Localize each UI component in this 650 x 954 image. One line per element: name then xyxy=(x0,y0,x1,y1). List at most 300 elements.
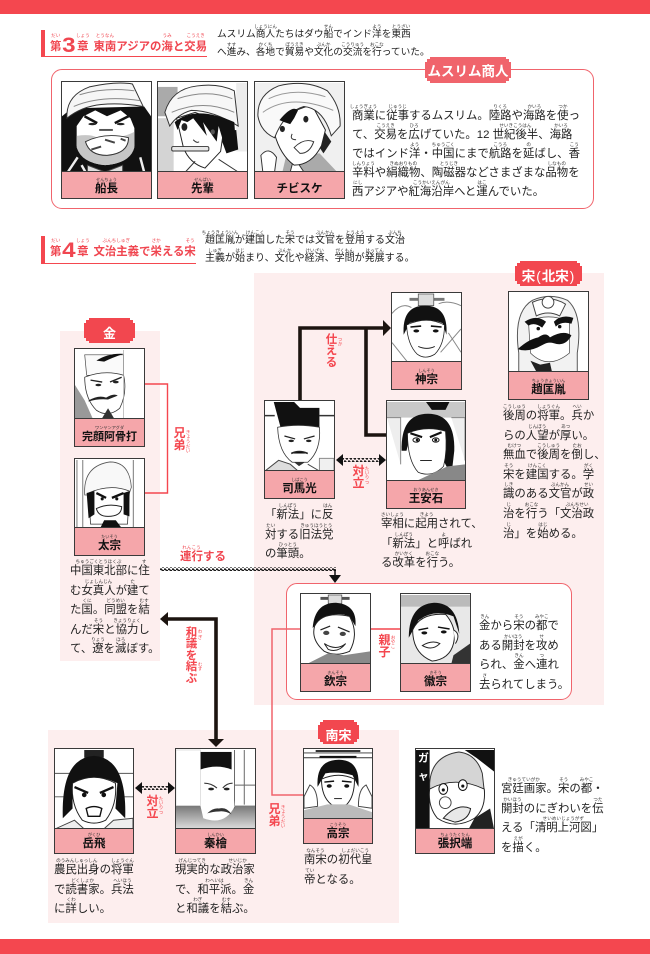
label: brothers xyxy=(173,426,191,453)
muslim merchants text: 品物 xyxy=(545,167,568,179)
text: しょうにん xyxy=(484,52,506,57)
text: Zhao Kuangyin: しき xyxy=(504,482,513,487)
text: Zhao Kuangyin: はじ xyxy=(538,522,548,527)
text: Jin: 国 xyxy=(81,604,93,616)
muslim merchants text: 延 xyxy=(523,148,534,160)
portrait: Qinzong: 欽宗 xyxy=(324,676,347,688)
text: Zhang Zeduan: 宋 xyxy=(558,783,569,795)
text: Zhao Kuangyin: がく xyxy=(584,463,593,468)
portrait: Zhang Zeduan xyxy=(415,748,495,854)
text: Jin: た xyxy=(130,579,135,584)
label: peace treaty: 結 xyxy=(186,661,197,673)
text: Zhang Zeduan: つた xyxy=(593,797,602,802)
chapter 4 intro text: 文治 xyxy=(385,235,405,246)
text: Zhao Kuangyin xyxy=(503,404,606,540)
text: Qinzong and Huizong: ある を め xyxy=(479,640,559,652)
text: Wang Anshi: に されて、 xyxy=(404,518,483,530)
chapter 4 intro text: 発展 xyxy=(365,253,385,264)
chapter 4 intro text: そう xyxy=(285,230,295,234)
text: Zhao Kuangyin: を する。 xyxy=(514,469,583,481)
label: peace treaty: ぶ xyxy=(186,673,197,685)
top band xyxy=(0,0,650,14)
label: serve xyxy=(326,333,343,369)
text: Jin: 宋 xyxy=(93,624,104,636)
arrow: serve xyxy=(300,320,391,435)
text: Zhang Zeduan: を く。 xyxy=(501,842,547,854)
portrait: Shenzong: しんそう xyxy=(418,368,435,373)
text: Sima Guang: たい xyxy=(266,523,275,528)
text: Jin: 同盟 xyxy=(104,604,127,616)
text: Zhao Kuangyin: せい xyxy=(584,482,593,487)
muslim merchants text: 使 xyxy=(557,110,569,122)
text: Wang Anshi: 「 」と ばれ xyxy=(381,538,472,550)
muslim merchants text: こうかいえんがん xyxy=(413,180,450,185)
muslim merchants text: 陶磁器 xyxy=(432,167,466,179)
text: Sima Guang: 反 xyxy=(322,509,333,521)
text: れんこう xyxy=(182,545,201,550)
text: Zhang Zeduan: える「 」 xyxy=(501,822,603,834)
chapter 4 heading: 第 xyxy=(50,246,61,258)
text: たいりつ xyxy=(365,466,370,484)
chapter 4 intro text: 建国 xyxy=(245,235,265,246)
chapter 3 intro text: ムスリム たちはダウ でインド を xyxy=(217,29,391,40)
text: Jin: 遼 xyxy=(92,643,104,655)
text: きょうだい xyxy=(281,805,286,828)
muslim merchants text: 交易 xyxy=(374,129,397,141)
text: Jin: くに xyxy=(83,598,92,603)
text: Zhang Zeduan: 都 xyxy=(581,783,592,795)
label: peace treaty xyxy=(186,626,203,685)
chapter 3 intro text: 交流 xyxy=(343,47,362,58)
chapter 4 heading: そう xyxy=(185,238,195,243)
text: Qin Hui: 和平派 xyxy=(197,884,232,896)
label: escort: する xyxy=(203,551,226,563)
text: Zhao Kuangyin: 文治政 xyxy=(560,508,594,520)
arrow: rivalry Sima Guang and Wang Anshi xyxy=(336,454,386,466)
tag: Northern Song xyxy=(515,261,582,286)
text: Zhao Kuangyin: あつ xyxy=(561,424,570,429)
text: Qin Hui: 結 xyxy=(221,903,232,915)
text: Zhao Kuangyin: けんこく xyxy=(528,463,546,468)
tag: muslim merchants: ムスリム xyxy=(428,64,482,79)
text: Zhao Kuangyin: 建国 xyxy=(526,469,549,481)
text: Sima Guang: きゅうほうとう xyxy=(300,523,332,528)
muslim merchants text: しなもの xyxy=(548,161,566,166)
chapter 3 intro text: せん xyxy=(324,24,333,28)
tag: Southern Song: 南宋 xyxy=(325,728,352,743)
muslim merchants text: 海路 xyxy=(523,110,546,122)
text: りくろ xyxy=(493,104,507,109)
muslim merchants text: て、 を げていた。12 、 xyxy=(352,129,550,141)
text: Sima Guang: 新法 xyxy=(276,509,299,521)
text: Zhang Zeduan: 清明上河図 xyxy=(535,822,592,834)
chapter 4 intro text: 趙匡胤 xyxy=(205,235,235,246)
text: Zhao Kuangyin: たお xyxy=(573,443,582,448)
bracket: brothers Wanyan Aguda and Taizong xyxy=(145,384,168,493)
text: Wang Anshi: 改革 xyxy=(392,557,415,569)
label: serve: る xyxy=(326,357,337,369)
chapter 4 heading: だい xyxy=(51,238,60,243)
text: Jin: 結 xyxy=(138,604,150,616)
text: Qinzong and Huizong: さ xyxy=(482,673,487,678)
chapter 3 heading: アジアの と xyxy=(116,41,184,53)
muslim merchants text: かいろ xyxy=(554,123,568,128)
text: Zhao Kuangyin: じんぼう xyxy=(528,424,546,429)
text: Zhao Kuangyin: こうしゅう xyxy=(537,443,560,448)
text: Zhang Zeduan: のにぎわいを xyxy=(524,803,592,815)
muslim merchants text: 陸路 xyxy=(489,110,512,122)
text: Qinzong and Huizong xyxy=(479,614,569,691)
text: Gaozong: てい xyxy=(305,868,314,873)
text: Zhao Kuangyin: 将軍 xyxy=(537,410,560,422)
portrait: Wang Anshi xyxy=(386,400,466,509)
muslim merchants text: ひろ xyxy=(410,123,419,128)
text: Jin: に xyxy=(127,565,138,577)
portrait: captain: 船長 xyxy=(95,182,118,194)
text: そう xyxy=(524,256,533,261)
label: brothers (Southern Song): 兄 xyxy=(268,802,280,816)
text: Qinzong and Huizong: 宋 xyxy=(513,620,525,632)
text: Gaozong: 初代皇 xyxy=(338,854,372,866)
chapter 3 intro text: 商人 xyxy=(256,29,275,40)
chapter 3 intro text: 洋 xyxy=(372,29,382,40)
portrait: captain: せんちょう xyxy=(96,177,117,182)
text: Zhao Kuangyin: のある が xyxy=(514,488,583,500)
tag: muslim merchants xyxy=(425,57,511,83)
text: Yue Fei: くわ xyxy=(67,897,76,902)
text: かいろ xyxy=(527,104,541,109)
chapter 4 heading: 栄 xyxy=(150,246,162,258)
text: Qinzong and Huizong: せ xyxy=(539,634,544,639)
text: Jin: ほろ xyxy=(116,637,125,642)
chapter 4 heading: さか xyxy=(152,238,161,243)
text: はん xyxy=(323,503,332,508)
muslim merchants text: 海路 xyxy=(550,129,572,141)
text: Wang Anshi: しんぽう xyxy=(395,532,413,537)
text: Jin xyxy=(70,558,159,655)
label: rivalry: 対 xyxy=(352,464,364,478)
portrait: Yue Fei: 岳飛 xyxy=(82,838,106,850)
muslim merchants text: 航路 xyxy=(489,148,512,160)
portrait: Zhang Zeduan: ャ xyxy=(418,770,429,782)
portrait: chibisuke xyxy=(254,81,345,199)
muslim merchants text: 西 xyxy=(352,186,363,198)
portrait: senior: せんぱい xyxy=(194,177,211,182)
portrait: Zhang Zeduan: ちょうたくたん xyxy=(440,832,470,837)
muslim merchants text xyxy=(350,104,580,198)
chapter 3 intro text: こうりゅう xyxy=(341,42,364,46)
label: brothers (Southern Song) xyxy=(268,802,286,828)
portrait: Taizong (Jin) xyxy=(74,458,145,556)
text: Jin: きょうりょく xyxy=(113,618,141,623)
portrait: Sima Guang xyxy=(264,400,335,499)
portrait: Qin Hui: 秦檜 xyxy=(204,838,227,850)
panel: Jin background xyxy=(60,331,160,661)
muslim merchants text: 絹織物 xyxy=(386,167,420,179)
text: Qin Hui: 金 xyxy=(243,884,254,896)
text: Yue Fei: に しい。 xyxy=(54,903,111,915)
line: parent and child xyxy=(371,628,400,630)
text: Zhao Kuangyin: 学 xyxy=(583,469,594,481)
portrait: Sima Guang: しばこう xyxy=(291,477,308,482)
chapter 4 heading xyxy=(41,236,196,264)
text: Sima Guang: 「 」に xyxy=(265,509,322,521)
text: Zhang Zeduan: 宮廷画家 xyxy=(501,783,547,795)
muslim merchants text: に するムスリム。 や を っ xyxy=(375,110,580,122)
portrait: Qinzong: きんそう xyxy=(327,670,344,675)
chapter 4 heading: で える xyxy=(139,246,184,258)
text: Yue Fei: で 。 xyxy=(54,884,111,896)
muslim merchants text: や 、 などさまざまな を xyxy=(375,167,580,179)
text: Qinzong and Huizong: 金 xyxy=(513,659,525,671)
portrait: Zhao Kuangyin: 趙匡胤 xyxy=(531,384,566,396)
chapter 3 intro text: よう xyxy=(372,24,381,28)
chapter 3 heading: 章 xyxy=(77,41,88,53)
text: Gaozong xyxy=(304,848,372,886)
text: なんそう xyxy=(329,715,348,720)
chapter 4 heading: 文治主義 xyxy=(94,246,139,258)
text: Zhao Kuangyin: 政 xyxy=(583,488,594,500)
portrait: Wang Anshi: 王安石 xyxy=(409,492,443,504)
portrait: Taizong (Jin): 太宗 xyxy=(98,540,121,552)
text: す xyxy=(142,559,146,564)
muslim merchants text: しんりょう xyxy=(352,161,375,166)
label: rivalry (Southern Song): 対 xyxy=(146,794,158,808)
text: Yue Fei: へいほう xyxy=(113,878,132,883)
portrait: Zhao Kuangyin xyxy=(508,291,589,400)
text: そう xyxy=(514,614,524,619)
panel: Northern Song background xyxy=(254,273,604,705)
chapter 3 intro text: 貿易 xyxy=(285,47,304,58)
portrait: chibisuke: チビスケ xyxy=(276,182,322,194)
muslim merchants text: にし xyxy=(353,180,362,185)
label: brothers (Southern Song): 弟 xyxy=(268,814,280,828)
chapter 3 heading xyxy=(41,30,207,57)
text: むす xyxy=(198,662,203,671)
text: Jin: 滅 xyxy=(115,643,126,655)
text: Zhao Kuangyin: 人望 xyxy=(526,430,549,442)
portrait: Qin Hui: しんかい xyxy=(207,832,224,837)
text: Zhao Kuangyin: の 。 か xyxy=(526,410,594,422)
chapter 4 intro text: ぶんか xyxy=(278,248,292,252)
chapter 4 heading: しょう xyxy=(76,238,90,243)
tag: Northern Song: 北宋 xyxy=(542,269,569,284)
panel: Southern Song background xyxy=(48,730,399,923)
text: Wang Anshi: 宰相 xyxy=(381,518,404,530)
text: Qinzong and Huizong: きん xyxy=(514,653,524,658)
chapter 3 heading: うみ xyxy=(163,33,172,38)
text: Qin Hui: わへいは xyxy=(205,878,224,883)
text: Gaozong: 南宋 xyxy=(304,854,327,866)
tag: Jin xyxy=(84,318,135,343)
chapter 4 intro text: けいざい xyxy=(305,248,324,252)
text: Qin Hui: わぎ xyxy=(193,897,202,902)
text: げんじつてき xyxy=(178,858,206,863)
text: しんぽう xyxy=(279,503,297,508)
text: Yue Fei: の xyxy=(100,864,111,876)
text: へい xyxy=(573,404,582,409)
text: たいりつ xyxy=(159,796,164,814)
text: きよう xyxy=(420,512,433,517)
text: Zhao Kuangyin: 文官 xyxy=(549,488,571,500)
label: parent and child xyxy=(378,633,396,659)
portrait: captain xyxy=(61,81,152,199)
text: Zhao Kuangyin: で を し、 xyxy=(526,449,606,461)
chapter 4 intro text: しゅぎ xyxy=(208,248,222,252)
text: Yue Fei: 将軍 xyxy=(111,864,134,876)
text: Zhang Zeduan: 伝 xyxy=(592,803,604,815)
label: parent and child: 子 xyxy=(378,645,390,659)
muslim merchants text: こうろ xyxy=(493,142,507,147)
muslim merchants text: 商業 xyxy=(352,110,375,122)
muslim merchants text: ちゅうごく xyxy=(432,142,455,147)
portrait: Zhang Zeduan: ガ xyxy=(418,752,429,765)
chapter 3 intro text: 進 xyxy=(227,47,236,58)
text: のうみんしゅっしん xyxy=(56,858,97,863)
text: Qin Hui: むす xyxy=(222,897,231,902)
text: Qinzong and Huizong: 連 xyxy=(536,659,548,671)
text: Qinzong and Huizong: られ、 へ れ xyxy=(479,659,559,671)
label: rivalry (Southern Song): 立 xyxy=(146,806,158,820)
text: Qin Hui xyxy=(175,858,255,915)
chapter 4 intro text: 主義 xyxy=(205,253,225,264)
muslim merchants text: 中国 xyxy=(432,148,455,160)
portrait: Yue Fei xyxy=(54,748,134,854)
chapter 4 intro text: はってん xyxy=(366,248,384,252)
text: Qin Hui: 和議 xyxy=(186,903,209,915)
text: Zhao Kuangyin: 無血 xyxy=(503,449,526,461)
portrait: Zhao Kuangyin: ちょうきょういん xyxy=(532,378,565,383)
chapter 3 intro text: おこな xyxy=(370,42,384,46)
muslim merchants text: 辛料 xyxy=(352,167,375,179)
text: Zhao Kuangyin: ぶんかん xyxy=(551,482,569,487)
text: Wang Anshi: る を う。 xyxy=(381,557,460,569)
chapter 4 intro text: が した では を する xyxy=(235,235,385,246)
tag: Northern Song: 宋 xyxy=(522,269,535,284)
portrait: Wanyan Aguda: 完顔阿骨打 xyxy=(82,430,137,442)
text: Qin Hui: きん xyxy=(244,878,253,883)
text: Yue Fei: 農民出身 xyxy=(54,864,100,876)
chapter 4 heading: ぶんちしゅぎ xyxy=(102,238,130,243)
label: rivalry: 立 xyxy=(352,476,364,490)
text: Zhao Kuangyin: じ xyxy=(506,502,511,507)
label: brothers: 弟 xyxy=(173,438,186,452)
chapter 4 intro text: 登用 xyxy=(345,235,365,246)
text: せいじか xyxy=(228,858,247,863)
text: Qinzong and Huizong: 開封 xyxy=(502,640,525,652)
text: Qin Hui: で、 。 xyxy=(175,884,243,896)
text: みやこ xyxy=(580,777,593,782)
text: Wang Anshi: 行 xyxy=(427,557,438,569)
text: Yue Fei: どくしょか xyxy=(71,878,94,883)
text: Sima Guang: 筆頭 xyxy=(276,548,299,560)
text: Sima Guang xyxy=(265,503,333,560)
chapter 3 heading: だい xyxy=(51,33,60,38)
chapter 4 intro text: 文化 xyxy=(275,253,295,264)
portrait: Shenzong: 神宗 xyxy=(415,374,438,386)
text: Wang Anshi xyxy=(381,512,483,569)
muslim merchants text: せいきこうはん xyxy=(499,123,531,128)
text: Zhang Zeduan: 。 の ・ xyxy=(547,783,604,795)
text: Sima Guang: の 。 xyxy=(265,548,311,560)
text: Qinzong and Huizong: 攻 xyxy=(536,640,547,652)
portrait: Huizong xyxy=(400,593,471,692)
text: Yue Fei: 兵法 xyxy=(111,884,134,896)
tag: Northern Song: ( ) xyxy=(536,269,574,284)
portrait: Qin Hui xyxy=(175,748,256,854)
label: rivalry xyxy=(352,464,370,490)
text: Zhao Kuangyin: 倒 xyxy=(571,449,583,461)
text: きん xyxy=(480,614,489,619)
text: きん xyxy=(105,313,114,318)
chapter 4 intro text: 始 xyxy=(235,253,245,264)
label: rivalry (Southern Song) xyxy=(146,794,164,820)
text: つか xyxy=(558,104,567,109)
text: Qinzong and Huizong: られてしまう。 xyxy=(490,679,569,691)
chapter 4 intro text: が まり、 や 、 が する。 xyxy=(225,253,415,264)
text: Jin: 建 xyxy=(127,585,138,597)
chapter 3 intro text: ぼうえき xyxy=(285,42,304,46)
label: escort xyxy=(180,545,226,563)
text: Jin: て、 を ぼす。 xyxy=(70,643,159,655)
text: きゅうていがか xyxy=(508,777,540,782)
text: Sima Guang: する xyxy=(276,529,299,541)
portrait: Gaozong: こうそう xyxy=(330,822,346,827)
text: Sima Guang: 旧法党 xyxy=(299,529,333,541)
text: Zhao Kuangyin: そう xyxy=(504,463,513,468)
muslim merchants text: 従事 xyxy=(386,110,409,122)
text: Gaozong: の xyxy=(327,854,338,866)
text: Zhang Zeduan xyxy=(501,776,604,854)
chapter 3 intro text: 東西 xyxy=(391,29,411,40)
text: Zhang Zeduan: かいほう xyxy=(503,797,522,802)
text: Qinzong and Huizong: 去 xyxy=(479,679,490,691)
text: Jin: 協力 xyxy=(116,624,138,636)
muslim merchants text: 香 xyxy=(569,148,580,160)
portrait: Wang Anshi: おうあんせき xyxy=(413,487,439,492)
text: Wang Anshi: 新法 xyxy=(392,538,415,550)
text: おやこ xyxy=(391,635,396,649)
text: Zhang Zeduan: えが xyxy=(514,836,523,841)
text: Zhang Zeduan: 描 xyxy=(512,842,524,854)
text: しょうぎょう xyxy=(350,104,377,109)
portrait: Qinzong xyxy=(300,593,371,692)
text: Qinzong and Huizong: 金 xyxy=(479,620,490,632)
text: Qinzong and Huizong: から の で xyxy=(490,620,559,632)
chapter 3 heading: 第 xyxy=(50,41,61,53)
chapter 3 intro text: 文化 xyxy=(314,47,333,58)
tag: muslim merchants: 商人 xyxy=(482,64,508,79)
label: escort: 連行 xyxy=(180,551,203,563)
text: Jin: むす xyxy=(140,598,149,603)
text: Qin Hui: な xyxy=(209,864,221,876)
muslim merchants text: 世紀後半 xyxy=(493,129,538,141)
text: ほくそう xyxy=(546,256,564,261)
chapter 3 heading: こうえき xyxy=(186,33,205,38)
portrait: Gaozong: 高宗 xyxy=(326,828,350,840)
tag: Southern Song xyxy=(318,720,359,744)
text: こうしゅう xyxy=(503,404,526,409)
text: Zhao Kuangyin: らの が い。 xyxy=(503,430,594,442)
text: Zhao Kuangyin: を う「 xyxy=(514,508,560,520)
arrow: escort xyxy=(160,567,341,583)
chapter 3 heading: 東南 xyxy=(94,41,116,53)
text: Jin: どうめい xyxy=(106,598,125,603)
text: Jin: た 。 を xyxy=(70,604,138,616)
portrait: Shenzong xyxy=(391,292,462,390)
chapter 3 heading: 3 xyxy=(63,34,76,57)
text: Zhao Kuangyin: 後周 xyxy=(503,410,526,422)
